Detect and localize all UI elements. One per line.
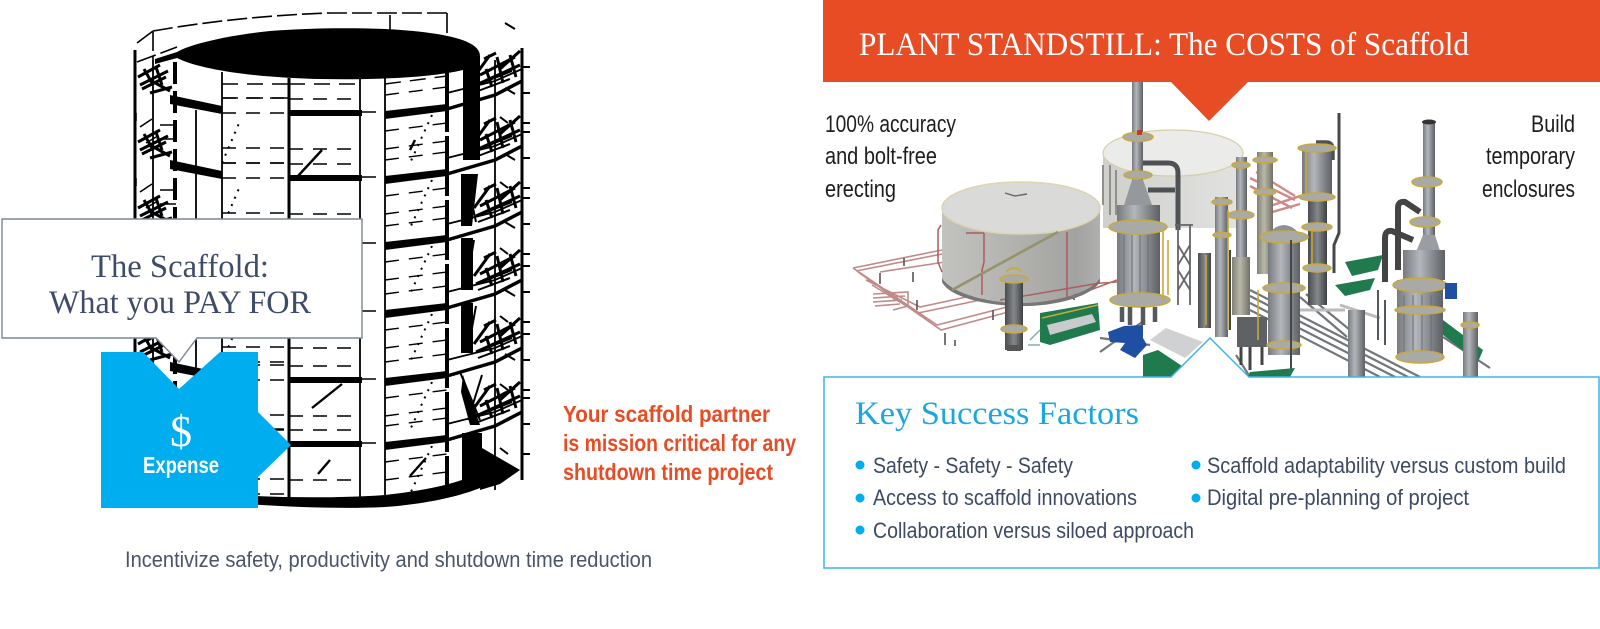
icon: red pipe rack [1250, 172, 1300, 216]
text: incentivize caption: Incentivize safety, productivity and shutdown time reduction [125, 547, 652, 572]
banner title: PLANT STANDSTILL: The COSTS of Scaffold [859, 27, 1469, 63]
text: accuracy note: 100% accuracy [825, 111, 956, 138]
list: factors column one [856, 453, 1194, 543]
icon: rear storage tank [1103, 130, 1243, 228]
text: mission critical note: Your scaffold partner [563, 401, 770, 427]
text: accuracy note [825, 111, 956, 203]
text: enclosures note [1482, 111, 1575, 203]
text: enclosures note: enclosures [1482, 176, 1575, 203]
callout heading: What you PAY FOR [49, 285, 311, 321]
list: factors column two [1192, 453, 1566, 510]
callout: the scaffold [2, 219, 362, 362]
icon: lower equipment [1150, 328, 1203, 358]
callout heading: The Scaffold: [91, 249, 269, 285]
icon: blue pumps [1108, 325, 1147, 358]
list: factors column one: Access to scaffold innovations [873, 485, 1137, 510]
list: factors column one: Collaboration versus siloed approach [873, 518, 1194, 543]
text: mission critical note [563, 401, 796, 485]
icon: small column and skid [1000, 268, 1100, 351]
icon: scaffold top opening [155, 28, 480, 160]
text: mission critical note: shutdown time project [563, 459, 773, 485]
text: accuracy note: erecting [825, 176, 896, 203]
icon: pipe network [853, 250, 1117, 330]
icon: front storage tank [938, 182, 1100, 306]
plant illustration [853, 82, 1490, 380]
callout heading [49, 249, 311, 321]
list: factors column two: Digital pre-planning of project [1207, 485, 1469, 510]
panel: key success factors [824, 338, 1599, 568]
icon: pipe racks [1100, 290, 1490, 377]
list: factors column two: Scaffold adaptability versus custom build [1207, 453, 1566, 478]
icon: main stack tower [1109, 82, 1193, 325]
text: enclosures note: temporary [1486, 143, 1575, 170]
scaffold illustration [135, 13, 530, 508]
text: enclosures note: Build [1531, 111, 1575, 138]
panel heading: Key Success Factors [855, 396, 1139, 432]
expense label: Expense [143, 452, 219, 478]
icon: dollar sign: $ [170, 407, 192, 456]
icon: right stack tower [1378, 120, 1483, 380]
icon: central towers [1198, 113, 1383, 380]
panel: expense [101, 352, 291, 508]
header banner [823, 0, 1600, 121]
list: factors column one: Safety - Safety - Safety [873, 453, 1073, 478]
text: mission critical note: is mission critical for any [563, 430, 796, 456]
text: accuracy note: and bolt-free [825, 143, 937, 170]
